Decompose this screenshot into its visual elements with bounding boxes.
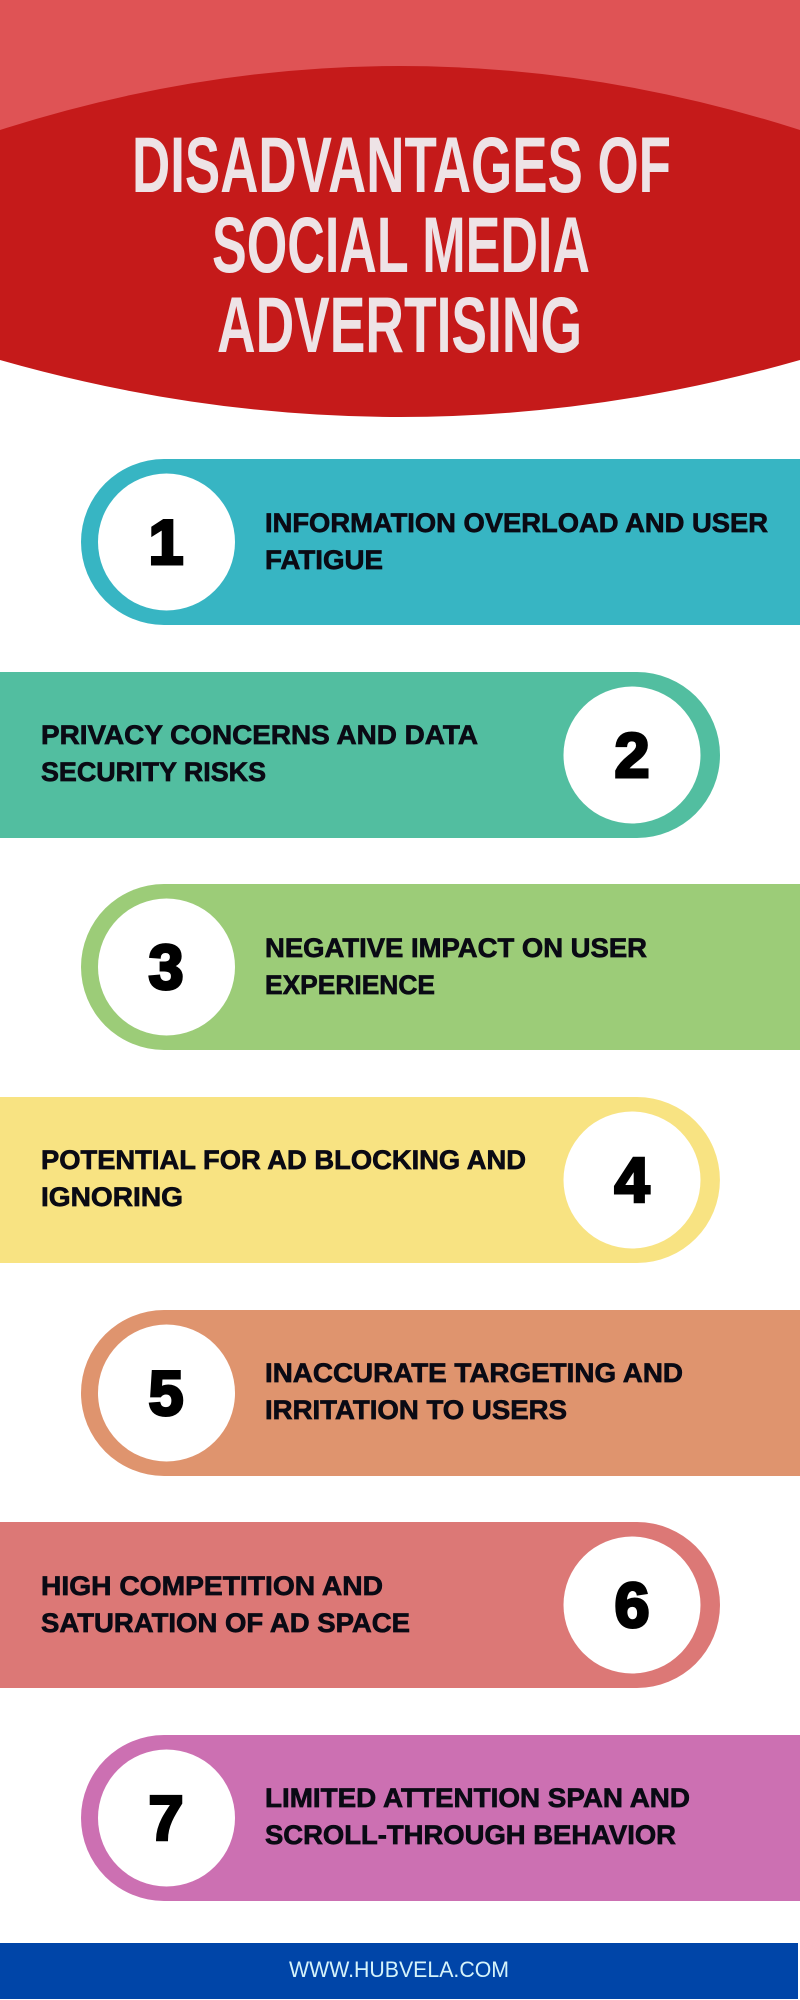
item 3: negative impact: 3 (148, 933, 184, 1003)
item 2: privacy concerns: SECURITY RISKS (41, 757, 266, 787)
item 7: limited attention: SCROLL-THROUGH BEHAVIOR (265, 1820, 676, 1850)
title (132, 120, 671, 369)
item 5: inaccurate targeting (81, 1310, 800, 1476)
item 6: high competition: SATURATION OF AD SPACE (41, 1608, 410, 1638)
item 7: limited attention (81, 1735, 800, 1901)
header band: light red (0, 0, 800, 140)
item 5: inaccurate targeting: INACCURATE TARGETING AND (265, 1358, 683, 1388)
item 4: ad blocking: 4 (614, 1146, 650, 1216)
footer bar (0, 1943, 798, 1999)
item 7: limited attention: LIMITED ATTENTION SPAN AND (265, 1783, 690, 1813)
item 5: inaccurate targeting: IRRITATION TO USERS (265, 1395, 567, 1425)
item 1: information overload (81, 459, 800, 625)
item 7: limited attention: 7 (148, 1784, 184, 1854)
item 4: ad blocking: IGNORING (41, 1182, 183, 1212)
item 6: high competition: 6 (614, 1571, 650, 1641)
item 6: high competition (0, 1522, 720, 1688)
item 6: high competition: HIGH COMPETITION AND (41, 1571, 383, 1601)
item 3: negative impact: EXPERIENCE (265, 970, 435, 1000)
header shape: dark red lens (0, 66, 800, 417)
item 2: privacy concerns: PRIVACY CONCERNS AND DATA (41, 720, 478, 750)
item 4: ad blocking (0, 1097, 720, 1263)
item 1: information overload: FATIGUE (265, 545, 383, 575)
item 5: inaccurate targeting: 5 (148, 1359, 184, 1429)
item 1: information overload: INFORMATION OVERLOAD AND USER (265, 508, 768, 538)
item 2: privacy concerns (0, 672, 720, 838)
title: ADVERTISING (217, 280, 582, 369)
item 3: negative impact: NEGATIVE IMPACT ON USER (265, 933, 647, 963)
footer bar: WWW.HUBVELA.COM (289, 1957, 509, 1982)
title: SOCIAL MEDIA (212, 200, 590, 289)
item 2: privacy concerns: 2 (614, 721, 650, 791)
item 1: information overload: 1 (148, 508, 184, 578)
item 3: negative impact (81, 884, 800, 1050)
item 4: ad blocking: POTENTIAL FOR AD BLOCKING AND (41, 1145, 526, 1175)
